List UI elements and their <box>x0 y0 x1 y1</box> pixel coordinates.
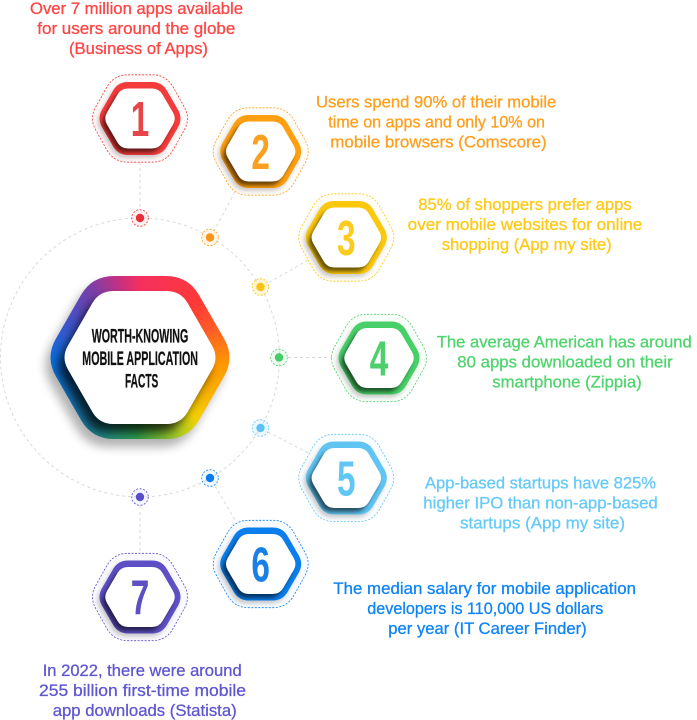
step 5 <box>252 420 658 532</box>
fact 7 text: 255 billion first-time mobile <box>39 681 246 700</box>
fact 6 text: per year (IT Career Finder) <box>388 619 587 638</box>
badge 1 <box>92 75 188 162</box>
fact 6 text: The median salary for mobile application <box>333 579 636 598</box>
badge 4: 4 <box>370 331 389 386</box>
step 1 <box>30 0 243 226</box>
node 1 <box>132 210 148 226</box>
step 4 <box>271 314 692 402</box>
fact 5 text: higher IPO than non-app-based <box>423 493 658 512</box>
fact 2 text: Users spend 90% of their mobile <box>316 92 556 111</box>
fact 2 text: mobile browsers (Comscore) <box>330 132 547 151</box>
step 7 <box>39 489 246 720</box>
heading: WORTH-KNOWING <box>92 326 188 348</box>
badge 5 <box>299 434 394 522</box>
fact 4 text: 80 apps downloaded on their <box>457 353 673 372</box>
fact 5 text <box>423 473 658 532</box>
fact 2 text: time on apps and only 10% on <box>328 112 545 131</box>
badge 5: 5 <box>337 451 356 506</box>
badge 1: 1 <box>131 92 149 147</box>
badge 7 <box>92 553 188 641</box>
heading <box>82 326 198 392</box>
badge 6: 6 <box>251 537 270 592</box>
badge 2: 2 <box>251 125 270 180</box>
badge 3: 3 <box>337 211 356 266</box>
orbit ring <box>0 218 280 497</box>
connector 4 <box>288 356 332 358</box>
fact 2 text <box>316 92 556 151</box>
heading: MOBILE APPLICATION <box>82 348 198 370</box>
fact 7 text: app downloads (Statista) <box>53 701 237 720</box>
connector 1 <box>139 162 141 209</box>
fact 6 text: developers is 110,000 US dollars <box>367 599 603 618</box>
node 7 <box>132 489 148 505</box>
fact 3 text: shopping (App my site) <box>442 235 612 254</box>
step 3 <box>252 194 642 295</box>
fact 1 text: for users around the globe <box>37 19 235 38</box>
connector 7 <box>139 506 141 553</box>
connector 6 <box>215 486 235 520</box>
badge 3 <box>299 194 394 281</box>
connector 5 <box>268 432 310 454</box>
badge 4 <box>332 314 426 402</box>
central hexagon <box>40 276 230 453</box>
fact 3 text <box>408 195 642 254</box>
badge 2 <box>213 108 308 195</box>
fact 4 text <box>437 333 692 392</box>
fact 7 text: In 2022, there were around <box>43 661 242 680</box>
badge 6 <box>213 520 308 608</box>
connector 3 <box>268 260 308 283</box>
fact 7 text <box>39 661 246 720</box>
node 6 <box>202 470 218 486</box>
fact 6 text <box>333 579 636 638</box>
fact 1 text: (Business of Apps) <box>69 39 208 58</box>
step 6 <box>202 470 636 638</box>
fact 5 text: startups (App my site) <box>460 513 625 532</box>
step 2 <box>202 92 556 246</box>
node 5 <box>252 420 269 436</box>
fact 1 text <box>30 0 243 58</box>
node 2 <box>202 229 218 246</box>
fact 3 text: over mobile websites for online <box>408 215 642 234</box>
node 4 <box>271 349 287 366</box>
fact 4 text: The average American has around <box>437 333 692 352</box>
node 3 <box>252 279 269 295</box>
fact 3 text: 85% of shoppers prefer apps <box>418 195 632 214</box>
badge 7: 7 <box>131 570 149 625</box>
fact 5 text: App-based startups have 825% <box>425 473 656 492</box>
connector 2 <box>214 192 235 230</box>
fact 4 text: smartphone (Zippia) <box>492 373 642 392</box>
heading: FACTS <box>125 370 158 392</box>
